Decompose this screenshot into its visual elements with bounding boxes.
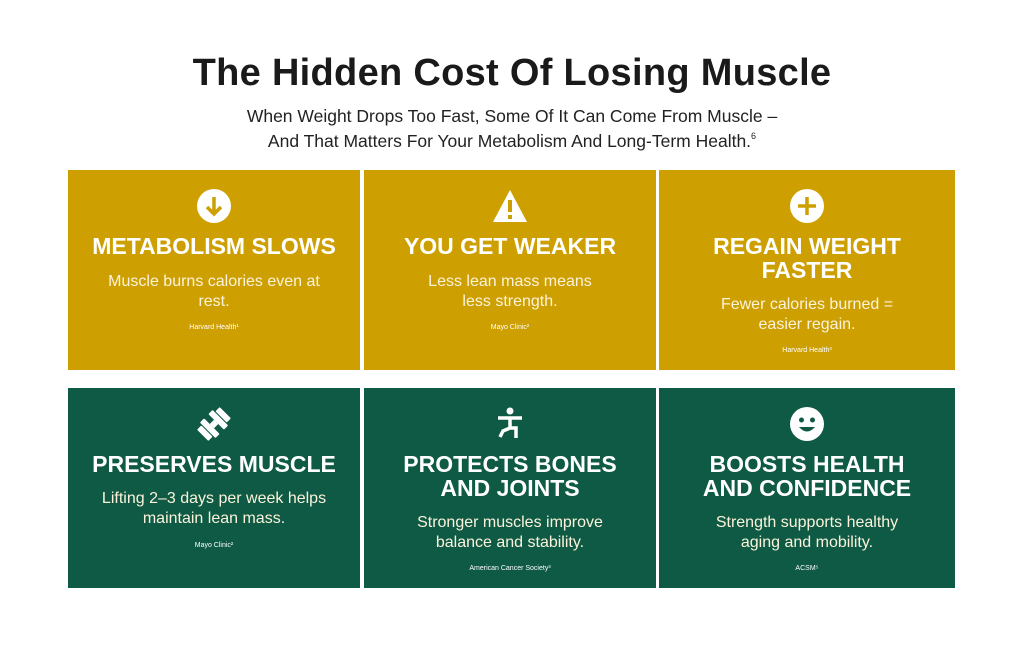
title: The Hidden Cost Of Losing Muscle xyxy=(193,52,831,94)
panel: you get weaker xyxy=(364,170,656,370)
body: Muscle burns calories even at xyxy=(108,273,320,290)
panel: preserves muscle xyxy=(68,388,360,588)
source: Mayo Clinic² xyxy=(491,324,529,331)
heading: PROTECTS BONES xyxy=(403,451,617,477)
body: Lifting 2–3 days per week helps xyxy=(102,490,326,507)
heading: YOU GET WEAKER xyxy=(404,233,616,259)
body xyxy=(721,296,893,333)
body xyxy=(102,490,326,527)
source: ACSM⁵ xyxy=(795,565,819,572)
subtitle: And That Matters For Your Metabolism And Long-Term Health.6 xyxy=(268,131,756,151)
heading: REGAIN WEIGHT xyxy=(713,233,901,259)
source: Mayo Clinic² xyxy=(195,542,233,549)
body xyxy=(417,514,603,551)
icon: warning xyxy=(493,190,527,222)
heading: AND JOINTS xyxy=(440,475,580,501)
heading: BOOSTS HEALTH xyxy=(709,451,905,477)
body: rest. xyxy=(198,293,230,310)
body: balance and stability. xyxy=(436,534,584,551)
panel: protects bones and joints xyxy=(364,388,656,588)
panel: regain weight faster xyxy=(659,170,955,370)
body: aging and mobility. xyxy=(741,534,873,551)
heading xyxy=(713,233,901,283)
icon: plus xyxy=(790,189,824,223)
heading xyxy=(403,451,617,501)
body: Strength supports healthy xyxy=(716,514,898,531)
body: Less lean mass means xyxy=(428,273,592,290)
icon: exercise figure xyxy=(498,408,522,438)
body: easier regain. xyxy=(759,316,855,333)
heading xyxy=(703,451,911,501)
body: Fewer calories burned = xyxy=(721,296,893,313)
subtitle xyxy=(247,106,778,151)
heading: FASTER xyxy=(762,257,852,283)
icon: smiley xyxy=(790,407,824,441)
heading: METABOLISM SLOWS xyxy=(92,233,336,259)
body xyxy=(428,273,592,310)
body xyxy=(108,273,320,310)
body xyxy=(716,514,898,551)
panel: metabolism slows xyxy=(68,170,360,370)
subtitle: When Weight Drops Too Fast, Some Of It Can Come From Muscle – xyxy=(247,106,777,126)
body: Stronger muscles improve xyxy=(417,514,603,531)
heading: AND CONFIDENCE xyxy=(703,475,911,501)
body: maintain lean mass. xyxy=(143,510,285,527)
icon: dumbbell xyxy=(197,407,231,441)
source: Harvard Health³ xyxy=(782,347,832,354)
source: American Cancer Society³ xyxy=(469,565,551,572)
panel: boosts health and confidence xyxy=(659,388,955,588)
source: Harvard Health¹ xyxy=(189,324,239,331)
heading: PRESERVES MUSCLE xyxy=(92,451,336,477)
icon: down arrow xyxy=(197,189,231,223)
body: less strength. xyxy=(462,293,558,310)
